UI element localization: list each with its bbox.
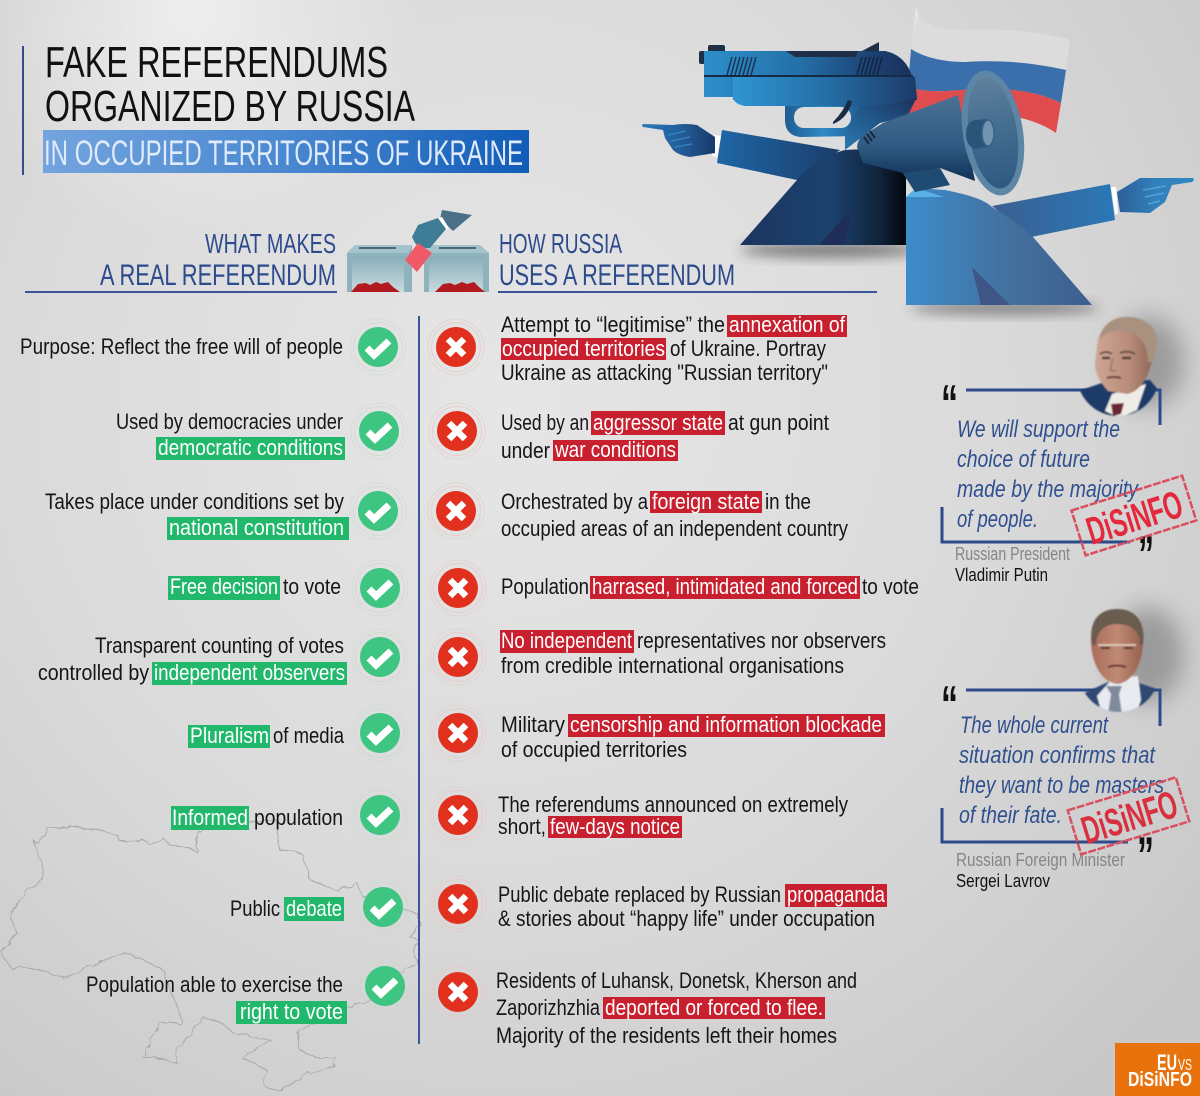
hand: left	[642, 124, 715, 157]
quote frame: ”	[1137, 827, 1154, 885]
icon: check	[355, 879, 411, 935]
fake: deported	[496, 968, 857, 1048]
fake: harassed: Population	[501, 574, 589, 599]
icon: check	[352, 787, 408, 843]
fake: no independent observers: representatives nor observers	[637, 628, 886, 653]
real: informed: Informed	[172, 805, 248, 830]
fake: foreign state: foreign state	[652, 489, 760, 514]
title block	[22, 38, 529, 175]
title line 2: ORGANIZED BY RUSSIA	[45, 82, 415, 131]
quote text: choice of future	[957, 446, 1090, 473]
flag: Russia	[906, 5, 1070, 133]
fake: annexation: Attempt to “legitimise” the	[501, 312, 725, 337]
quote frame: ”	[1138, 526, 1154, 584]
fake: aggressor state: at gun point	[728, 410, 829, 435]
row 4	[168, 560, 919, 616]
real: democratic conditions: Used by democracies under	[116, 409, 343, 434]
row 6	[188, 705, 885, 762]
attribution	[956, 850, 1125, 891]
real: pluralism: Pluralism	[190, 723, 269, 748]
fake: propaganda: propaganda	[787, 882, 886, 907]
icon: cross	[430, 629, 486, 685]
icon: cross	[430, 705, 486, 761]
icon: check	[350, 483, 406, 539]
quote text: We will support the	[957, 416, 1120, 443]
quote text: made by the majority	[957, 476, 1140, 503]
real: national constitution: national constitution	[169, 515, 344, 540]
arm: left	[717, 130, 840, 180]
attribution: Russian President	[955, 544, 1070, 564]
attribution: Russian Foreign Minister	[956, 850, 1125, 870]
logo: EU vs Disinfo: EU	[1157, 1050, 1177, 1075]
real: pluralism	[188, 723, 345, 748]
row 3	[45, 483, 848, 541]
row 5	[38, 628, 886, 685]
attribution	[955, 544, 1070, 585]
real: right to vote	[86, 972, 347, 1024]
map: outline of Ukraine	[0, 820, 421, 1092]
row 2	[116, 403, 829, 463]
fake: aggressor state: under	[501, 438, 550, 463]
row 9	[86, 958, 857, 1048]
fake: propaganda: Public debate replaced by Russian	[498, 882, 781, 907]
fake: foreign state: Orchestrated by a	[501, 489, 649, 514]
quote text: of their fate.	[959, 802, 1062, 829]
figure: left	[642, 124, 906, 245]
logo: EU vs Disinfo	[1115, 1043, 1200, 1096]
column heading: how Russia uses a referendum: USES A REFERENDUM	[499, 259, 735, 292]
fake: annexation: occupied territories	[502, 336, 665, 361]
real: free decision: to vote	[283, 574, 341, 599]
fake: short notice: The referendums announced on extremely	[498, 792, 848, 817]
fake: foreign state: occupied areas of an independent country	[501, 516, 848, 541]
real: democratic conditions	[116, 409, 345, 460]
fake: deported: Majority of the residents left their homes	[496, 1023, 837, 1048]
icon: cross	[430, 876, 486, 932]
real: purpose: Purpose: Reflect the free will of people	[20, 334, 343, 359]
quote text	[959, 712, 1164, 829]
real: independent observers: Transparent counting of votes	[95, 633, 344, 658]
icon: check	[351, 403, 407, 459]
real: informed	[171, 805, 343, 830]
row 1	[20, 312, 847, 385]
fake: harassed: harrased, intimidated and forced	[592, 574, 858, 599]
real: independent observers: controlled by	[38, 660, 149, 685]
real: informed: population	[254, 805, 343, 830]
fake: deported: Residents of Luhansk, Donetsk, Kherson and	[496, 968, 857, 993]
real: free decision: Free decision	[170, 574, 278, 599]
fake: annexation: Ukraine as attacking "Russian territory"	[501, 360, 828, 385]
fake: censorship	[501, 712, 885, 762]
icon: check	[352, 560, 408, 616]
figure: right	[906, 178, 1194, 305]
fake: short notice: short,	[498, 814, 546, 839]
fake: censorship: of occupied territories	[501, 737, 687, 762]
real: right to vote: right to vote	[240, 999, 343, 1024]
fake: foreign state	[501, 489, 848, 541]
attribution: Vladimir Putin	[955, 565, 1048, 585]
real: national constitution: Takes place under conditions set by	[45, 489, 344, 514]
fake: aggressor state: Used by an	[501, 410, 589, 435]
panel: Lavrov quote	[941, 607, 1190, 891]
fake: aggressor state	[501, 410, 829, 463]
quote frame: “	[941, 375, 958, 433]
fake: short notice	[498, 792, 848, 839]
gun	[699, 42, 917, 150]
fake: propaganda: & stories about “happy life” under occupation	[498, 906, 875, 931]
fake: no independent observers	[500, 628, 886, 678]
column heading: how Russia uses a referendum: HOW RUSSIA	[499, 228, 622, 259]
fake: censorship: Military	[501, 712, 565, 737]
quote frame: “	[941, 676, 958, 734]
column heading: what makes a real referendum: A REAL REFERENDUM	[100, 259, 336, 292]
real: debate	[230, 896, 344, 921]
icon: check	[350, 319, 406, 375]
real: debate: Public	[230, 896, 280, 921]
fake: no independent observers: from credible international organisations	[501, 653, 844, 678]
fake: censorship: censorship and information blockade	[570, 712, 882, 737]
body: left	[740, 147, 906, 245]
column heading: how Russia uses a referendum	[498, 228, 877, 293]
fake: harassed: to vote	[862, 574, 919, 599]
icon: check	[352, 705, 408, 761]
real: democratic conditions: democratic conditions	[158, 435, 343, 460]
column heading: what makes a real referendum: WHAT MAKES	[205, 228, 336, 259]
fake: annexation	[501, 312, 847, 385]
illustration: gun, flag, megaphone and pointing figures	[642, 5, 1194, 315]
icon: cross	[430, 964, 486, 1020]
quote text: of people.	[957, 506, 1038, 533]
column heading: what makes a real referendum	[25, 228, 337, 293]
arm: right	[992, 184, 1115, 237]
subtitle band	[43, 130, 529, 173]
fake: annexation: annexation of	[729, 312, 846, 337]
icon: ballot boxes with hand	[347, 210, 489, 292]
portrait: Sergei Lavrov	[1084, 608, 1156, 713]
hand: right	[1117, 178, 1194, 213]
fake: annexation: of Ukraine. Portray	[670, 336, 826, 361]
icon: cross	[428, 319, 484, 375]
body: right	[906, 188, 1092, 305]
quote frame	[941, 676, 1160, 885]
fake: deported: Zaporizhzhia	[496, 995, 601, 1020]
icon: cross	[430, 560, 486, 616]
fake: aggressor state: aggressor state	[593, 410, 723, 435]
real: pluralism: of media	[273, 723, 345, 748]
icon: check	[352, 629, 408, 685]
attribution: Sergei Lavrov	[956, 871, 1050, 891]
title: FAKE REFERENDUMS	[45, 38, 388, 87]
icon: cross	[428, 483, 484, 539]
quote frame	[941, 375, 1160, 584]
icon: check	[357, 958, 413, 1014]
portrait: Vladimir Putin	[1075, 317, 1160, 420]
real: national constitution	[45, 489, 349, 540]
real: independent observers: independent observers	[154, 660, 345, 685]
row 7	[171, 787, 848, 843]
fake: deported: deported or forced to flee.	[605, 995, 823, 1020]
icon: cross	[429, 403, 485, 459]
megaphone	[857, 66, 1032, 200]
fake: foreign state: in the	[765, 489, 811, 514]
real: debate: debate	[286, 896, 342, 921]
fake: aggressor state: war conditions	[554, 437, 676, 462]
quote text: The whole current	[960, 712, 1109, 739]
real: independent observers	[38, 633, 347, 685]
fake: propaganda	[498, 882, 887, 931]
panel: Putin quote	[941, 316, 1197, 585]
fake: no independent observers: No independent	[501, 628, 632, 653]
row 8	[230, 876, 887, 935]
subtitle: IN OCCUPIED TERRITORIES OF UKRAINE	[44, 134, 523, 173]
quote text: situation confirms that	[959, 742, 1156, 769]
icon: cross	[430, 787, 486, 843]
centre divider	[418, 316, 420, 1044]
shadows	[740, 242, 920, 258]
logo: EU vs Disinfo: VS	[1178, 1057, 1192, 1074]
quote text	[957, 416, 1140, 533]
fake: short notice: few-days notice	[550, 814, 680, 839]
real: right to vote: Population able to exercise the	[86, 972, 343, 997]
